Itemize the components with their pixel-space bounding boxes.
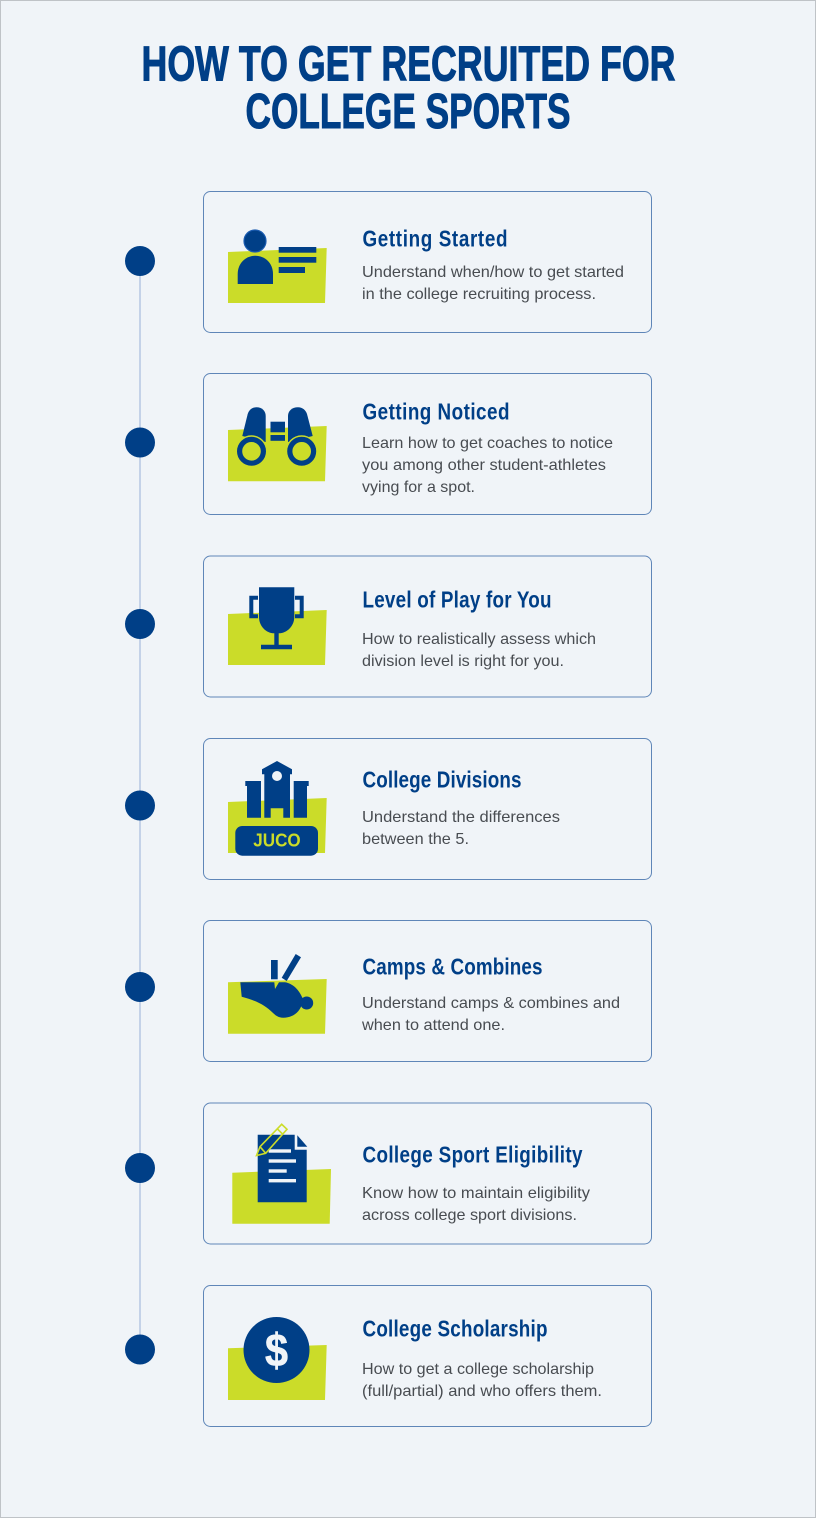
description xyxy=(362,435,613,496)
icon: binoculars xyxy=(228,407,327,481)
heading: Camps & Combines xyxy=(362,955,542,980)
description: Understand when/how to get started xyxy=(362,264,624,281)
description: Understand camps & combines and xyxy=(362,995,620,1012)
heading: College Divisions xyxy=(362,768,521,793)
icon: id card xyxy=(228,230,327,303)
description: Learn how to get coaches to notice xyxy=(362,435,613,452)
description: How to get a college scholarship xyxy=(362,1361,594,1378)
icon: dollar coin xyxy=(228,1317,327,1400)
icon: whistle xyxy=(228,954,327,1034)
icon: document and pencil xyxy=(232,1124,331,1224)
title: COLLEGE SPORTS xyxy=(246,85,570,139)
timeline xyxy=(125,246,155,1364)
heading: Getting Noticed xyxy=(362,400,510,425)
icon: trophy xyxy=(228,587,327,665)
heading: Getting Started xyxy=(362,227,507,252)
icon: college building: JUCO xyxy=(253,830,301,851)
description xyxy=(361,995,620,1034)
description: vying for a spot. xyxy=(362,479,475,496)
panel: getting started xyxy=(204,192,652,332)
panel: level of play xyxy=(204,556,652,697)
panel: college scholarship xyxy=(204,1286,652,1426)
icon: college building xyxy=(228,761,327,856)
heading: Level of Play for You xyxy=(362,588,552,613)
icon: dollar coin: $ xyxy=(265,1324,288,1376)
description xyxy=(362,1185,590,1224)
description: Understand the differences xyxy=(362,809,560,826)
description: you among other student-athletes xyxy=(362,457,606,474)
panel: college divisions xyxy=(204,738,652,880)
description: Know how to maintain eligibility xyxy=(362,1185,590,1202)
description xyxy=(362,264,624,303)
description: across college sport divisions. xyxy=(362,1207,577,1224)
heading: College Sport Eligibility xyxy=(362,1143,583,1168)
description: How to realistically assess which xyxy=(362,631,596,648)
description xyxy=(362,809,560,848)
description: when to attend one. xyxy=(361,1017,505,1034)
description: (full/partial) and who offers them. xyxy=(362,1383,602,1400)
panel: camps and combines xyxy=(204,920,652,1062)
description xyxy=(362,631,596,670)
description: in the college recruiting process. xyxy=(362,286,596,303)
panel: college sport eligibility xyxy=(204,1103,652,1244)
heading: College Scholarship xyxy=(362,1317,547,1342)
description: division level is right for you. xyxy=(362,653,564,670)
panel: getting noticed xyxy=(204,374,652,514)
description xyxy=(362,1361,602,1400)
title xyxy=(142,37,676,139)
description: between the 5. xyxy=(362,831,469,848)
